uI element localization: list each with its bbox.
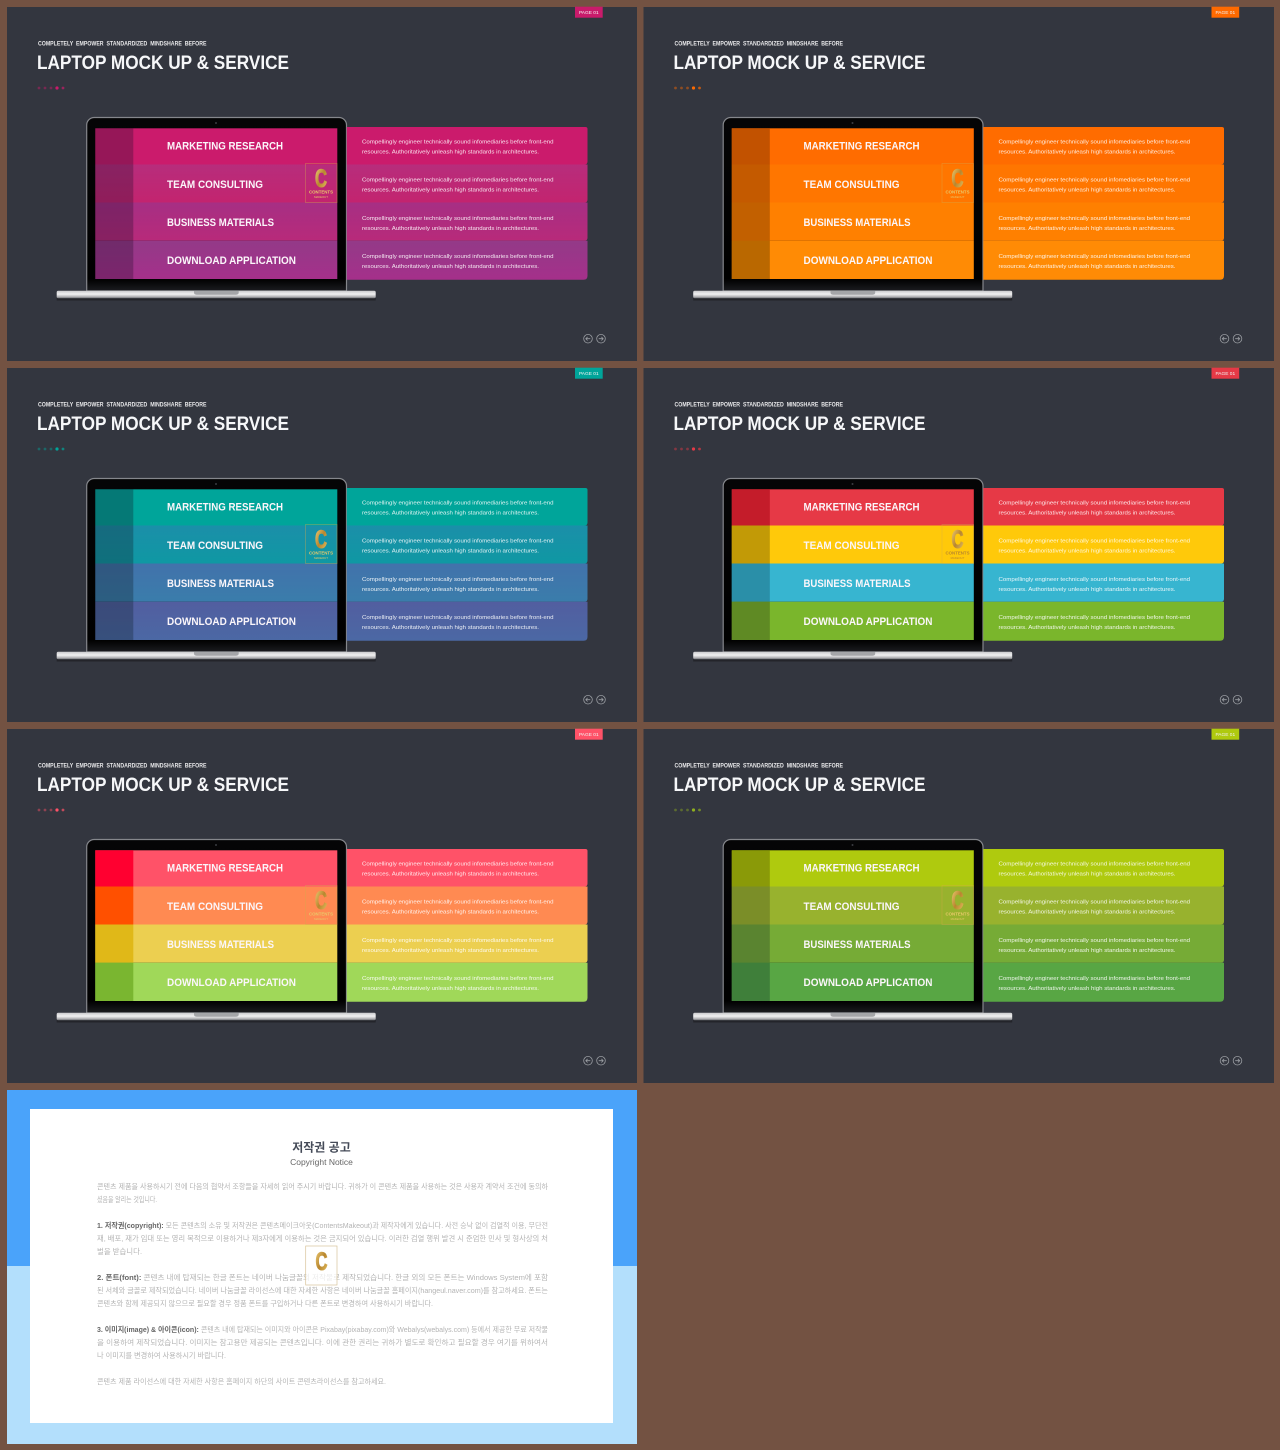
watermark logo: CONTENTS	[309, 912, 333, 916]
panel: orange slide	[644, 7, 1274, 361]
description bands: Compellingly engineer technically sound infomediaries before front-end	[998, 178, 1190, 184]
menu labels: TEAM CONSULTING	[804, 540, 900, 552]
watermark logo: C	[315, 526, 327, 554]
menu labels: MARKETING RESEARCH	[804, 141, 920, 153]
description bands: resources. Authoritatively unleash high standards in architectures.	[362, 510, 539, 516]
page tag: PAGE 01	[579, 10, 599, 16]
closing line: 콘텐츠 제품 라이선스에 대한 자세한 사항은 홈페이지 하단의 사이트 콘텐츠라이선스를 참고하세요.	[97, 1377, 386, 1386]
pagination dots	[674, 86, 701, 90]
page tag: PAGE 01	[1215, 732, 1235, 738]
panel: teal slide	[7, 368, 637, 722]
description bands: resources. Authoritatively unleash high standards in architectures.	[362, 625, 539, 631]
menu labels: TEAM CONSULTING	[167, 540, 263, 552]
title: LAPTOP MOCK UP & SERVICE	[37, 413, 289, 435]
description bands	[347, 127, 588, 280]
description bands	[347, 488, 588, 641]
section 2: font: 된 서체와 글꼴로 제작되었습니다. 네이버 나눔글꼴 라이선스에 대한 자세한 사항은 네이버 나눔글꼴 홈페이지(hangeul.naver.com)를 참고하세요. 폰트는	[97, 1286, 548, 1295]
section 3: image and icon: 나 이미지를 변경하여 사용하시기 바랍니다.	[97, 1351, 226, 1360]
watermark logo	[942, 164, 974, 202]
description bands: resources. Authoritatively unleash high standards in architectures.	[998, 948, 1176, 954]
description bands: resources. Authoritatively unleash high standards in architectures.	[362, 549, 539, 555]
watermark logo: CONTENTS	[946, 550, 970, 556]
eyebrow text: COMPLETELY EMPOWER STANDARDIZED MINDSHARE BEFORE	[674, 762, 843, 769]
section 1: copyright	[97, 1221, 548, 1256]
pagination dots	[38, 447, 64, 451]
panel: red yellow blue green slide	[644, 368, 1274, 722]
description bands: Compellingly engineer technically sound infomediaries before front-end	[362, 900, 554, 906]
section 3: image and icon	[97, 1325, 548, 1360]
section 2: font: 콘텐츠와 함께 제공되지 않으므로 필요할 경우 정품 폰트를 구입하거나 다른 폰트로 변경하여 사용하시기 바랍니다.	[97, 1299, 433, 1308]
laptop mockup	[693, 478, 1012, 662]
description bands: Compellingly engineer technically sound infomediaries before front-end	[362, 139, 554, 145]
menu labels: TEAM CONSULTING	[167, 901, 263, 913]
menu labels: TEAM CONSULTING	[167, 179, 263, 191]
page tag: PAGE 01	[1215, 10, 1235, 16]
menu labels: BUSINESS MATERIALS	[804, 217, 911, 229]
copyright subheading: Copyright Notice	[290, 1157, 353, 1167]
description bands: Compellingly engineer technically sound infomediaries before front-end	[998, 938, 1190, 944]
section 1: copyright: 1. 저작권(copyright): 모든 콘텐츠의 소유 및 저작권은 콘텐츠메이크아웃(ContentsMakeout)과 제작자에게 있습니다. 사전 승낙 없이 검열적 이용, 무단전	[97, 1221, 548, 1230]
description bands: resources. Authoritatively unleash high standards in architectures.	[362, 910, 539, 916]
watermark logo: CONTENTS	[309, 190, 333, 194]
description bands: resources. Authoritatively unleash high standards in architectures.	[362, 871, 539, 877]
watermark logo	[942, 886, 974, 924]
menu labels: BUSINESS MATERIALS	[167, 939, 274, 951]
laptop mockup	[693, 840, 1012, 1022]
title: LAPTOP MOCK UP & SERVICE	[674, 52, 926, 74]
description bands: Compellingly engineer technically sound infomediaries before front-end	[362, 500, 554, 506]
description bands: resources. Authoritatively unleash high standards in architectures.	[362, 188, 539, 194]
watermark logo	[306, 164, 337, 202]
description bands: resources. Authoritatively unleash high standards in architectures.	[362, 226, 539, 232]
menu labels: DOWNLOAD APPLICATION	[804, 255, 932, 267]
description bands: Compellingly engineer technically sound infomediaries before front-end	[998, 139, 1190, 145]
page tag	[575, 7, 603, 18]
menu labels: BUSINESS MATERIALS	[804, 939, 911, 951]
description bands: resources. Authoritatively unleash high standards in architectures.	[998, 871, 1176, 877]
watermark logo: MAKEOUT	[314, 917, 328, 921]
menu labels	[804, 502, 932, 628]
description bands: Compellingly engineer technically sound infomediaries before front-end	[362, 216, 554, 222]
description bands: resources. Authoritatively unleash high standards in architectures.	[998, 986, 1176, 992]
description bands: Compellingly engineer technically sound infomediaries before front-end	[362, 976, 554, 982]
description bands: Compellingly engineer technically sound infomediaries before front-end	[998, 500, 1190, 506]
description bands: resources. Authoritatively unleash high standards in architectures.	[362, 264, 539, 270]
menu labels: MARKETING RESEARCH	[804, 502, 920, 514]
menu labels: MARKETING RESEARCH	[804, 863, 920, 875]
description bands	[983, 127, 1224, 280]
eyebrow text: COMPLETELY EMPOWER STANDARDIZED MINDSHARE BEFORE	[38, 762, 206, 769]
watermark logo: C	[316, 1248, 328, 1276]
menu labels: MARKETING RESEARCH	[167, 863, 283, 875]
description bands: Compellingly engineer technically sound infomediaries before front-end	[998, 615, 1190, 621]
page tag	[1212, 729, 1239, 740]
panel: copyright notice	[7, 1090, 637, 1444]
description bands: resources. Authoritatively unleash high standards in architectures.	[362, 986, 539, 992]
title: LAPTOP MOCK UP & SERVICE	[674, 413, 926, 435]
description bands: Compellingly engineer technically sound infomediaries before front-end	[362, 861, 554, 867]
description bands: Compellingly engineer technically sound infomediaries before front-end	[362, 539, 554, 545]
watermark logo: MAKEOUT	[314, 195, 328, 199]
description bands: resources. Authoritatively unleash high standards in architectures.	[362, 587, 539, 593]
title: LAPTOP MOCK UP & SERVICE	[674, 774, 926, 796]
laptop mockup	[57, 840, 376, 1022]
watermark logo: C	[952, 887, 964, 915]
description bands: resources. Authoritatively unleash high standards in architectures.	[998, 510, 1176, 516]
description bands: Compellingly engineer technically sound infomediaries before front-end	[362, 254, 554, 260]
menu labels	[167, 502, 296, 628]
watermark logo: CONTENTS	[309, 550, 333, 556]
watermark logo	[306, 1246, 337, 1285]
panel: coral orange yellow lime slide	[7, 729, 637, 1083]
watermark logo: CONTENTS	[946, 190, 970, 194]
watermark logo: C	[952, 165, 964, 193]
navigation arrows	[1220, 334, 1242, 343]
watermark logo: MAKEOUT	[951, 917, 965, 921]
menu labels: DOWNLOAD APPLICATION	[804, 977, 932, 989]
page tag	[1212, 7, 1239, 18]
description bands	[983, 488, 1224, 641]
menu labels	[167, 863, 296, 989]
page tag	[1212, 368, 1239, 379]
description bands: Compellingly engineer technically sound infomediaries before front-end	[998, 976, 1190, 982]
menu labels	[167, 141, 296, 267]
menu labels: MARKETING RESEARCH	[167, 502, 283, 514]
copyright heading: 저작권 공고	[292, 1140, 351, 1154]
page tag	[575, 368, 603, 379]
intro paragraph: 셨음을 알리는 것입니다.	[97, 1195, 157, 1204]
section 2: font	[97, 1273, 548, 1308]
description bands: Compellingly engineer technically sound infomediaries before front-end	[362, 178, 554, 184]
menu labels	[804, 141, 932, 267]
watermark logo	[306, 524, 337, 564]
title: LAPTOP MOCK UP & SERVICE	[37, 52, 289, 74]
description bands: Compellingly engineer technically sound infomediaries before front-end	[998, 577, 1190, 583]
navigation arrows	[584, 1056, 605, 1065]
description bands: resources. Authoritatively unleash high standards in architectures.	[998, 226, 1176, 232]
menu labels: BUSINESS MATERIALS	[804, 578, 911, 590]
description bands: resources. Authoritatively unleash high standards in architectures.	[998, 549, 1176, 555]
navigation arrows	[1220, 695, 1242, 704]
eyebrow text: COMPLETELY EMPOWER STANDARDIZED MINDSHARE BEFORE	[38, 40, 206, 47]
page tag: PAGE 01	[579, 732, 599, 738]
pagination dots	[38, 86, 64, 90]
description bands: Compellingly engineer technically sound infomediaries before front-end	[362, 938, 554, 944]
menu labels: DOWNLOAD APPLICATION	[167, 255, 296, 267]
panel: magenta slide	[7, 7, 637, 361]
description bands: Compellingly engineer technically sound infomediaries before front-end	[998, 254, 1190, 260]
navigation arrows	[1220, 1056, 1242, 1065]
page tag	[575, 729, 603, 740]
eyebrow text: COMPLETELY EMPOWER STANDARDIZED MINDSHARE BEFORE	[38, 401, 206, 408]
description bands: resources. Authoritatively unleash high standards in architectures.	[362, 149, 539, 155]
menu labels: TEAM CONSULTING	[804, 179, 900, 191]
description bands: resources. Authoritatively unleash high standards in architectures.	[998, 587, 1176, 593]
watermark logo: MAKEOUT	[951, 556, 965, 560]
page tag: PAGE 01	[1215, 371, 1235, 377]
eyebrow text: COMPLETELY EMPOWER STANDARDIZED MINDSHARE BEFORE	[674, 401, 843, 408]
menu labels: DOWNLOAD APPLICATION	[167, 977, 296, 989]
menu labels: BUSINESS MATERIALS	[167, 217, 274, 229]
watermark logo: C	[315, 165, 327, 193]
watermark logo	[942, 524, 974, 564]
intro paragraph	[97, 1182, 548, 1204]
page tag: PAGE 01	[579, 371, 599, 377]
description bands: Compellingly engineer technically sound infomediaries before front-end	[998, 539, 1190, 545]
watermark logo: C	[315, 887, 327, 915]
description bands: resources. Authoritatively unleash high standards in architectures.	[998, 149, 1176, 155]
description bands	[347, 849, 588, 1002]
eyebrow text: COMPLETELY EMPOWER STANDARDIZED MINDSHARE BEFORE	[674, 40, 843, 47]
section 1: copyright: 재, 배포, 재가 임대 또는 영리 목적으로 이용하거나 제3자에게 이용하는 것은 금지되어 있습니다. 이러한 검열 행위 발견 시 준엄한 민사 및 형사상의 처	[97, 1234, 548, 1243]
description bands: resources. Authoritatively unleash high standards in architectures.	[998, 910, 1176, 916]
navigation arrows	[584, 695, 605, 704]
menu labels: DOWNLOAD APPLICATION	[804, 616, 932, 628]
description bands: resources. Authoritatively unleash high standards in architectures.	[998, 625, 1176, 631]
navigation arrows	[584, 334, 605, 343]
watermark logo: MAKEOUT	[314, 556, 328, 560]
description bands	[983, 849, 1224, 1002]
pagination dots	[674, 808, 701, 812]
watermark logo: MAKEOUT	[951, 195, 965, 199]
section 2: font: 2. 폰트(font): 콘텐츠 내에 탑재되는 한글 폰트는 네이버 나눔글꼴의 저작물로 제작되었습니다. 한글 외의 모든 폰트는 Windows System에 포함	[97, 1273, 548, 1282]
description bands: Compellingly engineer technically sound infomediaries before front-end	[362, 577, 554, 583]
menu labels	[804, 863, 932, 989]
menu labels: BUSINESS MATERIALS	[167, 578, 274, 590]
section 3: image and icon: 을 이용하여 제작되었습니다. 이미지는 참고용만 제공되는 콘텐츠입니다. 이에 관한 권리는 귀하가 별도로 확인하고 필요할 경우 여기를 위하여서	[97, 1338, 548, 1347]
pagination dots	[674, 447, 701, 451]
pagination dots	[38, 808, 64, 812]
description bands: Compellingly engineer technically sound infomediaries before front-end	[998, 216, 1190, 222]
laptop mockup	[57, 118, 376, 300]
watermark logo	[306, 886, 337, 924]
laptop mockup	[57, 478, 376, 662]
description bands: resources. Authoritatively unleash high standards in architectures.	[998, 264, 1176, 270]
description bands: Compellingly engineer technically sound infomediaries before front-end	[362, 615, 554, 621]
laptop mockup	[693, 118, 1012, 300]
watermark logo: C	[952, 526, 964, 554]
description bands: resources. Authoritatively unleash high standards in architectures.	[362, 948, 539, 954]
watermark logo: CONTENTS	[946, 912, 970, 916]
description bands: Compellingly engineer technically sound infomediaries before front-end	[998, 900, 1190, 906]
title: LAPTOP MOCK UP & SERVICE	[37, 774, 289, 796]
section 1: copyright: 벌을 받습니다.	[97, 1247, 142, 1256]
intro paragraph: 콘텐츠 제품을 사용하시기 전에 다음의 협약서 조항들을 자세히 읽어 주시기 바랍니다. 귀하가 이 콘텐츠 제품을 사용하는 것은 사용자 계약서 조건에 동의하	[97, 1182, 548, 1191]
panel: lime green slide	[644, 729, 1274, 1083]
menu labels: DOWNLOAD APPLICATION	[167, 616, 296, 628]
description bands: Compellingly engineer technically sound infomediaries before front-end	[998, 861, 1190, 867]
menu labels: MARKETING RESEARCH	[167, 141, 283, 153]
description bands: resources. Authoritatively unleash high standards in architectures.	[998, 188, 1176, 194]
section 3: image and icon: 3. 이미지(image) & 아이콘(icon): 콘텐츠 내에 탑재되는 이미지와 아이콘은 Pixabay(pixabay.com)와 Webalys(webalys.com) 등에서 제공한 무료 저작물	[97, 1325, 548, 1334]
menu labels: TEAM CONSULTING	[804, 901, 900, 913]
